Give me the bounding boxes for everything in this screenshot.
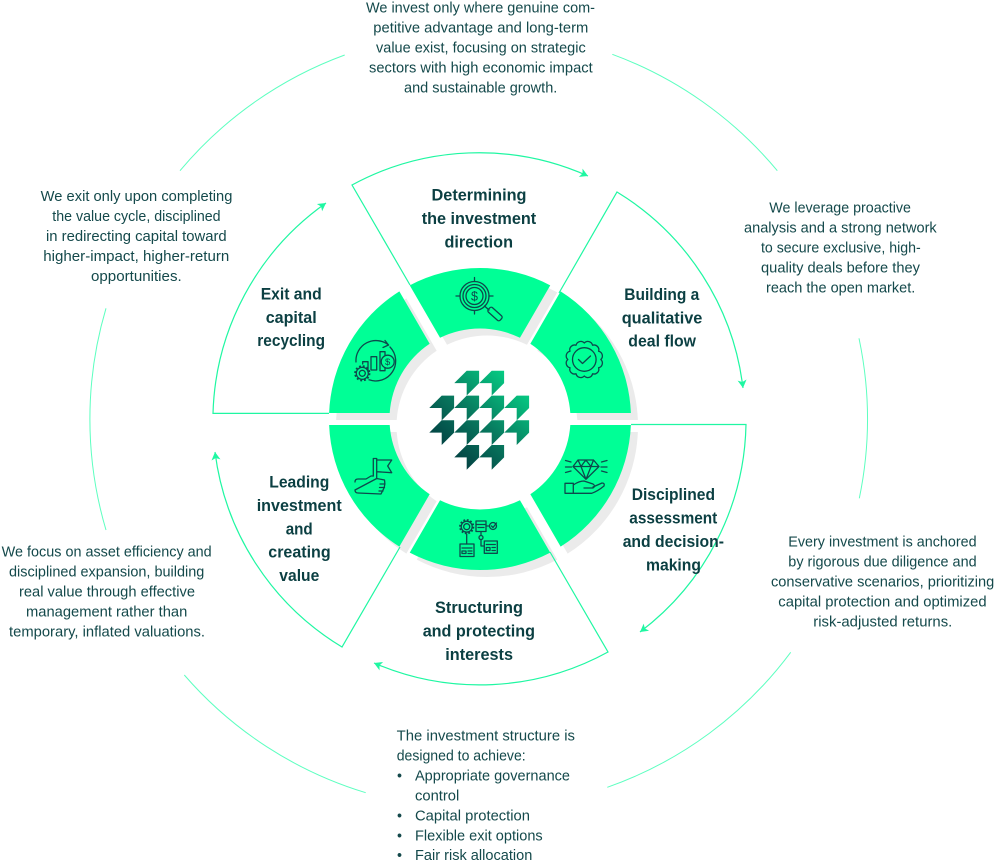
heading 2: Building a <box>624 286 700 304</box>
segment 5 <box>314 399 445 555</box>
panel: exit and capital recycling <box>213 199 445 439</box>
heading 6 <box>257 285 325 350</box>
text block: right upper description: quality deals before they <box>761 261 921 277</box>
icon: process flow <box>460 520 497 556</box>
segment 1 <box>410 268 550 338</box>
segment 3 <box>515 399 646 555</box>
text block: right upper description: reach the open market. <box>766 281 915 297</box>
icon: target magnifier <box>456 278 503 322</box>
text block: bottom description with list: The investment structure is <box>397 729 575 745</box>
text block: left lower description: We focus on asset efficiency and <box>2 545 212 561</box>
panel: building a qualitative deal flow <box>515 192 747 439</box>
outer ring arcs <box>90 54 867 793</box>
text block: left lower description: management rather than <box>26 605 187 621</box>
heading 3: making <box>646 556 701 574</box>
segment 6 <box>314 283 445 439</box>
panel: determining the investment direction <box>352 153 590 338</box>
heading 1: direction <box>444 234 513 252</box>
text block: top description: petitive advantage and long-term <box>373 21 588 37</box>
heading 3: assessment <box>629 510 718 528</box>
text block: bottom description with list <box>397 729 575 861</box>
text block: right lower description: by rigorous due diligence and <box>788 555 977 571</box>
heading 2: deal flow <box>628 333 696 351</box>
heading 5: and <box>286 520 313 538</box>
segment 4 <box>410 500 550 570</box>
text block: top description: We invest only where genuine com- <box>366 1 595 17</box>
text block: left upper description <box>41 189 232 285</box>
text block: left lower description: real value through effective <box>19 585 195 601</box>
outline arrow 5 <box>211 451 400 647</box>
heading 4 <box>423 599 535 664</box>
text block: top description: value exist, focusing on strategic <box>376 41 586 57</box>
heading 4: Structuring <box>435 599 523 617</box>
text block: left lower description <box>2 545 212 641</box>
text block: bottom description with list: • <box>397 829 402 845</box>
text block: bottom description with list: • <box>397 809 402 825</box>
icon: growth chart cycle: $ <box>385 357 391 368</box>
segment 2 <box>515 283 646 439</box>
text block: left upper description: in redirecting capital toward <box>46 229 227 245</box>
heading 1 <box>422 187 537 252</box>
heading 5 <box>257 474 342 585</box>
text block: right lower description: capital protection and optimized <box>778 595 987 611</box>
icon: quality badge <box>566 341 602 378</box>
text block: right lower description: Every investment is anchored <box>788 535 977 551</box>
heading 5: value <box>279 567 319 585</box>
text block: left upper description: opportunities. <box>91 269 182 285</box>
text block: bottom description with list: Flexible exit options <box>415 829 543 845</box>
heading 6: recycling <box>257 332 325 350</box>
heading 5: Leading <box>269 474 329 492</box>
text block: top description <box>366 1 595 97</box>
text block: right lower description: risk-adjusted returns. <box>813 615 952 631</box>
outline arrow 2 <box>559 192 747 389</box>
icon: hand with flag <box>355 458 392 494</box>
heading 2 <box>622 286 702 351</box>
icon: target magnifier: $ <box>471 290 478 304</box>
heading 5: investment <box>257 497 342 515</box>
outline arrow 1 <box>352 153 590 285</box>
text block: left lower description: disciplined expansion, building <box>9 565 204 581</box>
outline arrow 4 <box>372 552 608 685</box>
text block: left lower description: temporary, inflated valuations. <box>9 625 205 641</box>
text block: right upper description: to secure exclusive, high- <box>761 241 921 257</box>
heading 5: creating <box>268 544 331 562</box>
panel: structuring and protecting interests <box>372 500 608 685</box>
text block: bottom description with list: Capital protection <box>415 809 530 825</box>
panel: leading investment and creating value <box>211 399 445 647</box>
center logo <box>429 371 529 470</box>
outline arrow 3 <box>631 424 746 636</box>
text block: left upper description: We exit only upon completing <box>41 189 232 205</box>
panel: disciplined assessment and decision-making <box>515 399 746 636</box>
text block: bottom description with list: designed to achieve: <box>397 749 526 765</box>
text block: right upper description: We leverage proactive <box>769 201 911 217</box>
heading 4: and protecting <box>423 623 535 641</box>
heading 3 <box>623 486 724 574</box>
text block: bottom description with list: Appropriate governance <box>415 769 570 785</box>
text block: top description: sectors with high economic impact <box>369 61 593 77</box>
icon: diamond in hand <box>565 460 607 493</box>
text block: left upper description: higher-impact, higher-return <box>43 249 229 265</box>
heading 1: the investment <box>422 210 537 228</box>
heading 6: Exit and <box>261 285 322 303</box>
text block: right upper description <box>744 201 938 297</box>
heading 1: Determining <box>432 187 526 205</box>
outline arrow 6 <box>213 199 329 413</box>
text block: right lower description <box>771 535 994 631</box>
text block: top description: and sustainable growth. <box>404 81 557 97</box>
icon: growth chart cycle <box>355 340 396 381</box>
text block: bottom description with list: • <box>397 769 402 785</box>
heading 3: Disciplined <box>632 486 715 504</box>
text block: right upper description: analysis and a strong network <box>744 221 938 237</box>
heading 6: capital <box>266 309 317 327</box>
ring segment shadows <box>321 275 653 577</box>
text block: right lower description: conservative scenarios, prioritizing <box>771 575 994 591</box>
heading 3: and decision- <box>623 533 724 551</box>
heading 2: qualitative <box>622 309 702 327</box>
heading 4: interests <box>445 646 513 664</box>
text block: left upper description: the value cycle, disciplined <box>52 209 221 225</box>
text block: bottom description with list: control <box>415 789 459 805</box>
